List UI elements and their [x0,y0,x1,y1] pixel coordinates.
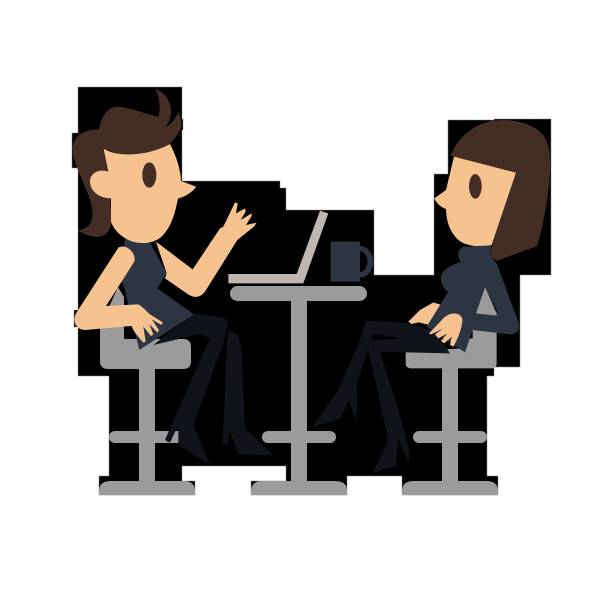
hair [73,89,182,237]
left woman legs [153,313,273,465]
right woman [434,120,550,261]
eye [142,162,156,188]
face [90,144,196,243]
table [230,286,367,495]
eye [469,174,482,199]
resting arm and hand [74,246,163,343]
black backdrop [72,87,551,495]
left woman [73,89,257,350]
face [434,157,516,246]
near hand [429,313,462,347]
right stool [402,287,498,495]
raised arm and hand [156,202,257,297]
left stool [99,287,195,495]
far hand [408,302,442,325]
coffee mug [331,242,370,282]
dress [120,239,194,350]
hair [451,120,550,261]
laptop [228,211,328,283]
right woman legs [312,321,450,473]
turtleneck top [427,245,519,352]
